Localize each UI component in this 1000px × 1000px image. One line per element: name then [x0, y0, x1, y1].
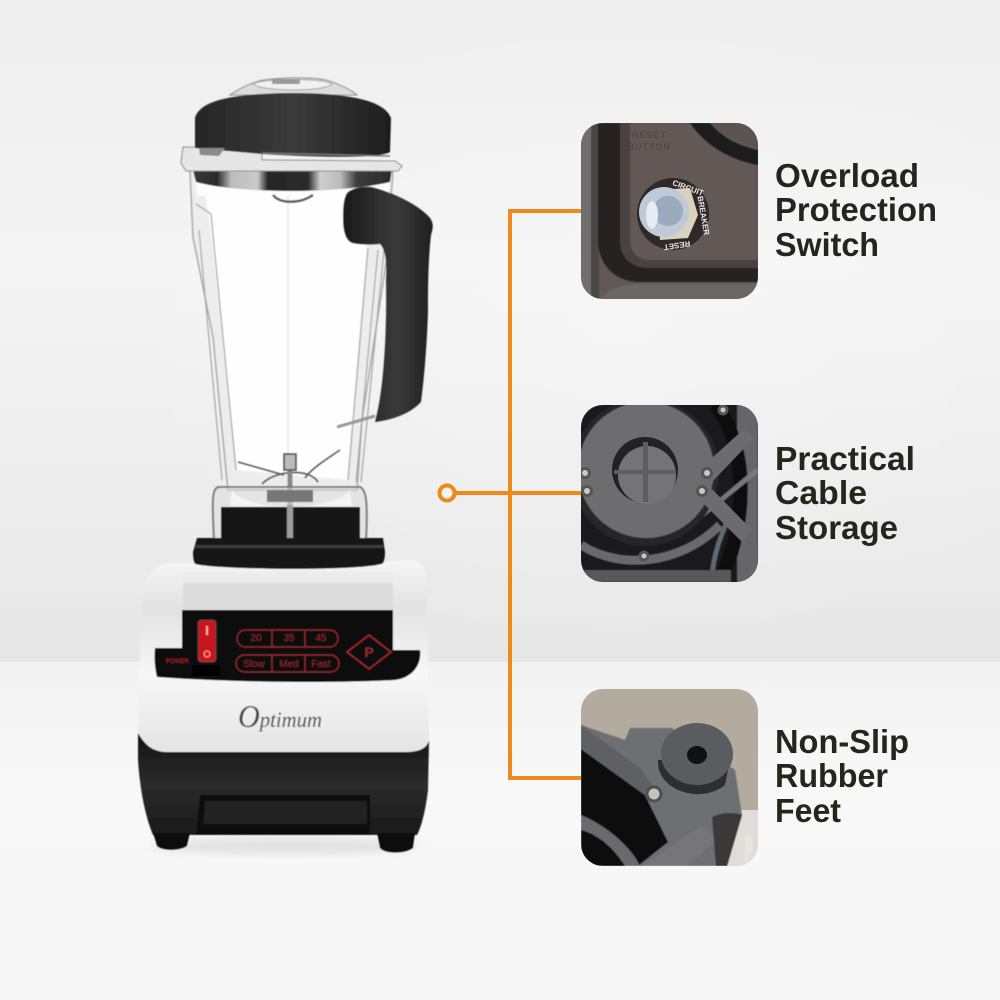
lid black dome: [195, 93, 391, 157]
front recess: [196, 795, 370, 835]
button labels: Fast: [311, 659, 331, 670]
blender product image: [138, 78, 433, 854]
blade collar: [213, 487, 367, 540]
label: practical cable storage: Practical: [775, 440, 915, 477]
panel: cable storage photo: [571, 398, 758, 582]
switch housing frame: [581, 123, 758, 299]
panel: overload switch photo: BUTTON: [628, 142, 671, 152]
breaker ring and button: CIRCUIT: [671, 178, 705, 198]
blade assembly: [238, 450, 340, 538]
button labels: Med: [279, 659, 299, 670]
outer shell and cable: [571, 398, 758, 582]
label: practical cable storage: Storage: [775, 509, 898, 546]
motor top plate: [193, 538, 385, 570]
label: non-slip rubber feet: Feet: [775, 792, 841, 829]
label: overload protection switch: Switch: [775, 226, 879, 263]
lid clear cap: [230, 78, 357, 95]
button labels: 35: [283, 633, 295, 644]
handle: [343, 187, 433, 422]
motor base white housing: [138, 560, 429, 752]
label: overload protection switch: Protection: [775, 191, 937, 228]
jar rim: [181, 147, 402, 171]
button labels: [243, 633, 374, 670]
jar details: [196, 195, 384, 482]
label: non-slip rubber feet: Rubber: [775, 757, 888, 794]
power label: POWER: [166, 659, 189, 665]
button labels: 20: [250, 633, 262, 644]
time buttons: [236, 630, 391, 672]
faint reset button label: RESET: [632, 130, 667, 140]
feet: [153, 833, 190, 850]
breaker ring and button: BREAKER: [695, 195, 711, 236]
power switch: [192, 620, 220, 676]
button labels: Slow: [243, 659, 266, 670]
floor shadow: [150, 838, 420, 854]
button labels: 45: [315, 633, 327, 644]
label: overload protection switch: [775, 157, 937, 263]
orange connector lines: [440, 211, 582, 778]
infographic canvas: [0, 76, 1000, 866]
screws: [580, 406, 727, 560]
panel: rubber feet photo: [581, 689, 758, 866]
control panel: [155, 610, 420, 682]
panel: overload switch photo: [581, 123, 758, 299]
rim tab: [199, 148, 225, 156]
retaining straps: [704, 433, 746, 542]
label: non-slip rubber feet: Non-Slip: [775, 723, 909, 760]
breaker ring and button: [637, 178, 711, 252]
brand name: Optimum: [238, 698, 322, 734]
rubber foot: [658, 723, 733, 794]
label: overload protection switch: Overload: [775, 157, 919, 194]
bracket and chassis: [581, 725, 752, 866]
motor base black lower: [138, 733, 429, 835]
label: practical cable storage: Cable: [775, 474, 867, 511]
label: practical cable storage: [775, 440, 915, 546]
jar inner shoulder: [191, 162, 393, 191]
connector origin dot: [440, 486, 454, 500]
foot screw: [647, 787, 661, 801]
jar clear interior: [205, 192, 378, 480]
breaker ring and button: RESET: [663, 239, 691, 252]
label: non-slip rubber feet: [775, 723, 909, 829]
button labels: P: [364, 644, 374, 660]
disc window with cross: [612, 437, 678, 504]
jar body: [190, 170, 393, 490]
